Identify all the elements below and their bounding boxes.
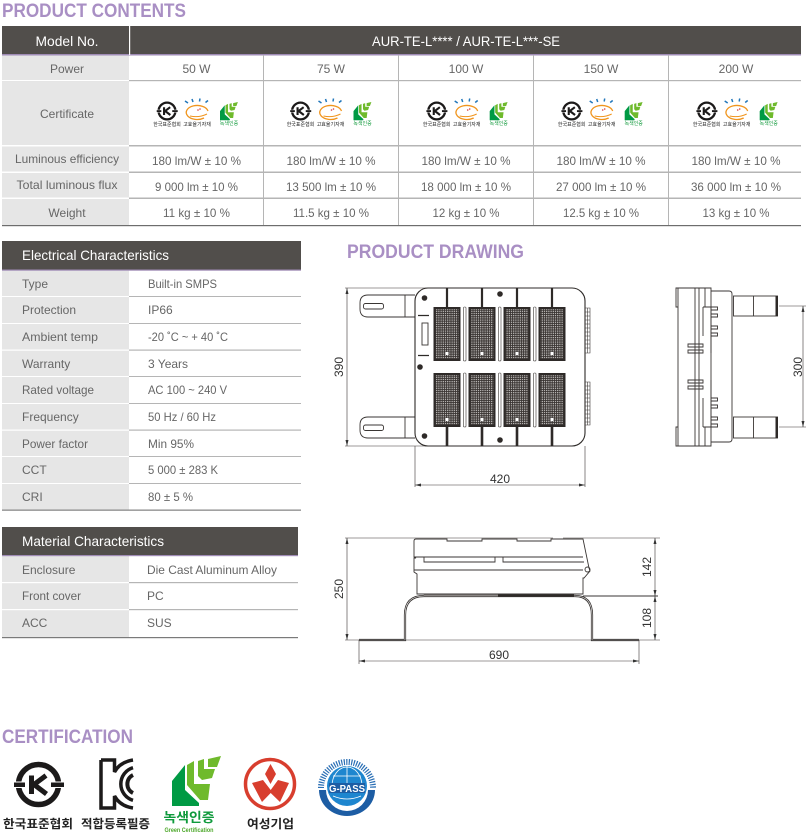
- row: enclosure: Die Cast Aluminum Alloy: [147, 563, 277, 577]
- drawing: front view: [332, 288, 590, 487]
- certificate icons: 50 W: 녹색인증: [220, 120, 239, 127]
- certificate icons: 50 W: [153, 98, 239, 128]
- logo: green certification: Green Certification: [164, 828, 214, 834]
- row: front cover: PC: [147, 589, 164, 603]
- row: weight: [48, 206, 770, 220]
- row: protection: Protection: [22, 303, 76, 317]
- row: luminous efficiency: 180 lm/W ± 10 %: [286, 154, 376, 168]
- row: type: Type: [22, 277, 48, 291]
- row: warranty: Warranty: [22, 357, 70, 371]
- certificate icons: 200 W: 녹색인증: [759, 120, 778, 127]
- stubs, dots and labels: [417, 288, 552, 446]
- row: power factor: [22, 437, 194, 451]
- logo: G-PASS: G-PASS: [329, 784, 365, 795]
- row: power: 200 W: [719, 62, 754, 76]
- LED modules bottom row: [434, 373, 566, 427]
- row: total luminous flux: 9 000 lm ± 10 %: [155, 180, 238, 194]
- certificate icons: 100 W: [423, 98, 508, 128]
- certificate icons: 100 W: 고효율기자재: [453, 121, 481, 128]
- row: type: [22, 277, 217, 291]
- row: acc: SUS: [147, 616, 172, 630]
- dimension: 142 and 108: [640, 538, 656, 640]
- row: type: Built-in SMPS: [148, 277, 217, 291]
- table: electrical characteristics: [2, 241, 301, 511]
- certificate icons: 150 W: 고효율기자재: [588, 121, 616, 128]
- row: weight: 13 kg ± 10 %: [702, 206, 770, 220]
- drawing: elevation view: [332, 538, 660, 664]
- dimension: 250: [332, 538, 660, 640]
- row: cct: CCT: [22, 463, 47, 477]
- right edge connectors: [585, 308, 590, 425]
- table: material characteristics: [2, 527, 298, 638]
- logo: G-PASS: [319, 762, 375, 816]
- row: weight: 12 kg ± 10 %: [432, 206, 500, 220]
- side brackets: [734, 296, 778, 438]
- row: cct: 5 000 ± 283 K: [148, 463, 218, 477]
- header: electrical characteristics: Electrical Characteristics: [22, 247, 169, 263]
- certificate icons: 75 W: [287, 98, 372, 128]
- row: luminous efficiency: 180 lm/W ± 10 %: [422, 154, 511, 168]
- row: weight: 11.5 kg ± 10 %: [293, 206, 369, 220]
- header: material characteristics: Material Characteristics: [22, 533, 164, 549]
- logo: women enterprise: 여성기업: [247, 816, 294, 831]
- row: power: [50, 62, 754, 76]
- row: luminous efficiency: 180 lm/W ± 10 %: [556, 154, 646, 168]
- table: product contents: [2, 26, 801, 226]
- row: luminous efficiency: 180 lm/W ± 10 %: [152, 154, 241, 168]
- dimension: 142 and 108: 142: [640, 557, 654, 577]
- row: frequency: 50 Hz / 60 Hz: [148, 410, 216, 424]
- heading: product contents: PRODUCT CONTENTS: [2, 1, 186, 22]
- header row: [36, 33, 560, 49]
- dimension: 390: [332, 288, 430, 446]
- row: luminous efficiency: Luminous efficiency: [15, 152, 119, 166]
- certificate icons: 75 W: 한국표준협회: [287, 121, 314, 128]
- logo: KS: 한국표준협회: [3, 816, 73, 831]
- certificate icons: 200 W: 한국표준협회: [693, 121, 721, 128]
- certificate icons: 100 W: 녹색인증: [489, 120, 508, 127]
- row: ambient temp: Ambient temp: [22, 330, 98, 344]
- housing profile: [414, 539, 590, 594]
- row: total luminous flux: 36 000 lm ± 10 %: [691, 180, 781, 194]
- dimension: 300: [779, 306, 806, 427]
- dimension: 420: 420: [490, 472, 510, 486]
- row: power: 150 W: [584, 62, 619, 76]
- row: weight: 12.5 kg ± 10 %: [563, 206, 639, 220]
- LED modules top row: [434, 307, 566, 361]
- certificate icons: 100 W: 한국표준협회: [423, 121, 451, 128]
- logo: green certification: 녹색인증: [164, 810, 215, 825]
- row: power factor: Min 95%: [148, 437, 194, 451]
- logo: KC: [81, 760, 150, 831]
- row: cri: 80 ± 5 %: [148, 490, 193, 504]
- certificate icons: 200 W: 고효율기자재: [723, 121, 751, 128]
- dimension: 690: [359, 640, 639, 664]
- row: power: 50 W: [182, 62, 211, 76]
- housing body: [415, 288, 585, 446]
- mounting brackets: [360, 295, 415, 438]
- logo: KS: [3, 764, 73, 831]
- row: frequency: [22, 410, 216, 424]
- row: weight: Weight: [48, 206, 86, 220]
- row: total luminous flux: 18 000 lm ± 10 %: [421, 180, 511, 194]
- row: rated voltage: AC 100 ~ 240 V: [148, 383, 227, 397]
- certificate icons: 75 W: 고효율기자재: [317, 121, 345, 128]
- logo: women enterprise: [246, 760, 294, 831]
- certificate icons: 150 W: 한국표준협회: [558, 121, 586, 128]
- row: total luminous flux: [16, 178, 781, 194]
- row: ambient temp: [22, 330, 228, 344]
- logo: KC: 적합등록필증: [81, 816, 150, 831]
- row: luminous efficiency: [15, 152, 781, 168]
- row: power factor: Power factor: [22, 437, 88, 451]
- dimension: 390: 390: [332, 357, 346, 377]
- header row: Model No.: [36, 33, 98, 49]
- dimension: 250: 250: [332, 579, 346, 599]
- row: protection: [22, 303, 173, 317]
- row: total luminous flux: 13 500 lm ± 10 %: [286, 180, 376, 194]
- certificate icons: 50 W: 한국표준협회: [153, 121, 181, 128]
- drawing: side view: [676, 288, 806, 446]
- side housing: [676, 288, 732, 446]
- row: warranty: 3 Years: [148, 357, 188, 371]
- certificate icons: 150 W: 녹색인증: [624, 120, 643, 127]
- heading: certification: CERTIFICATION: [2, 727, 133, 748]
- dimension: 690: 690: [489, 648, 509, 662]
- row: rated voltage: [22, 383, 227, 397]
- dimension: 300: 300: [791, 357, 805, 377]
- row: total luminous flux: Total luminous flux: [16, 178, 118, 192]
- row: acc: [22, 616, 172, 630]
- row: cct: [22, 463, 218, 477]
- row: power: Power: [50, 62, 84, 76]
- row: front cover: Front cover: [22, 589, 81, 603]
- row: warranty: [22, 357, 188, 371]
- row: total luminous flux: 27 000 lm ± 10 %: [556, 180, 646, 194]
- row: weight: 11 kg ± 10 %: [163, 206, 230, 220]
- row: enclosure: [22, 563, 277, 577]
- heading: product drawing: PRODUCT DRAWING: [347, 242, 524, 263]
- row: enclosure: Enclosure: [22, 563, 76, 577]
- row: rated voltage: Rated voltage: [22, 383, 94, 397]
- logo: green certification: [164, 756, 221, 834]
- dimension: 420: [415, 446, 585, 487]
- logos: certification: [3, 756, 375, 834]
- row: acc: ACC: [22, 616, 48, 630]
- certificate icons: 150 W: [558, 98, 643, 128]
- certificate icons: 50 W: 고효율기자재: [183, 121, 211, 128]
- row: power: 75 W: [317, 62, 346, 76]
- row: luminous efficiency: 180 lm/W ± 10 %: [692, 154, 781, 168]
- lower bracket: [359, 594, 658, 640]
- row: frequency: Frequency: [22, 410, 79, 424]
- certificate icons: 200 W: [693, 98, 778, 128]
- row: cri: CRI: [22, 490, 43, 504]
- certificate icons: 75 W: 녹색인증: [353, 120, 372, 127]
- header row: AUR-TE-L**** / AUR-TE-L***-SE: [372, 33, 560, 49]
- row: power: 100 W: [449, 62, 484, 76]
- row: front cover: [22, 589, 164, 603]
- row: ambient temp: -20 ˚C ~ + 40 ˚C: [148, 330, 228, 344]
- row: certificate: [40, 98, 778, 128]
- row: cri: [22, 490, 193, 504]
- row: certificate: Certificate: [40, 107, 94, 121]
- row: protection: IP66: [148, 303, 173, 317]
- dimension: 142 and 108: 108: [640, 608, 654, 628]
